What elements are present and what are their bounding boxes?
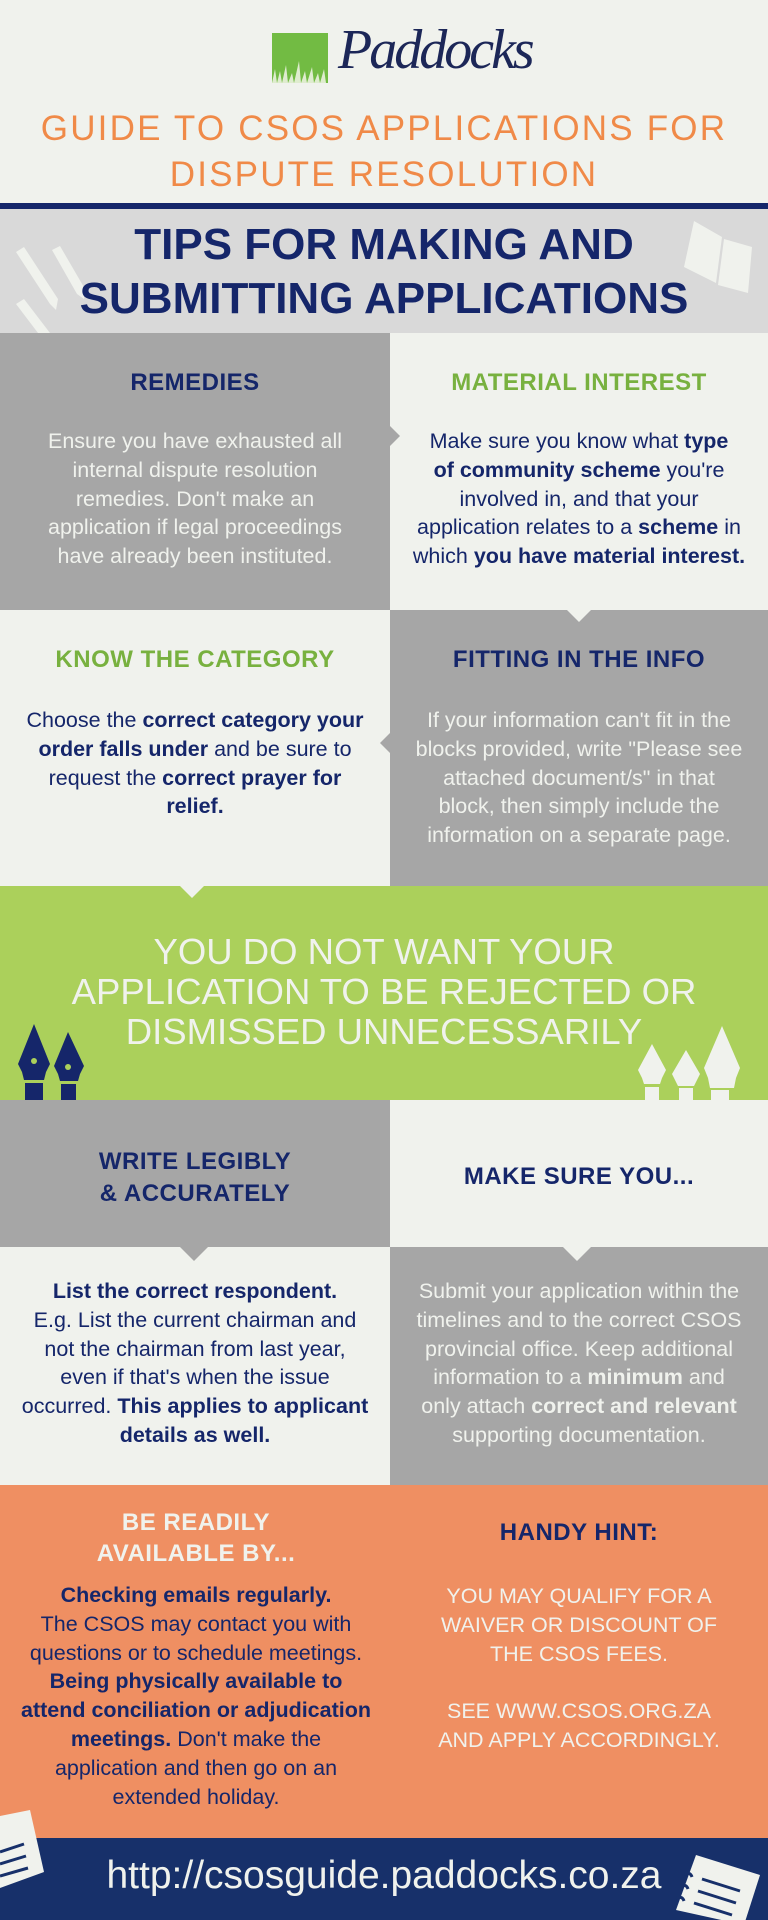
header background (0, 0, 768, 203)
navy rule (0, 203, 768, 209)
text: fitting body: If your information can't fit in the (427, 708, 731, 732)
panel: make sure body (390, 1247, 768, 1485)
arrow: make sure down (563, 1247, 591, 1261)
text: remedies body: application if legal proceedings (48, 515, 342, 539)
text: handy hint body: SEE WWW.CSOS.ORG.ZA (447, 1699, 711, 1723)
heading: tips for making and submitting applications: SUBMITTING APPLICATIONS (80, 274, 688, 323)
panel: know the category (26, 646, 364, 818)
text: remedies body: have already been instituted. (58, 544, 332, 568)
text: make sure body (416, 1279, 742, 1447)
text: remedies body: Ensure you have exhausted all (48, 429, 342, 453)
heading: write legibly: & ACCURATELY (100, 1180, 290, 1207)
text: respondent body: occurred. This applies to applicant (22, 1394, 368, 1418)
panel: green banner (0, 886, 768, 1100)
icon: open book (684, 221, 752, 293)
arrow: category down (180, 886, 204, 898)
text: availability body: application and then go on an (55, 1756, 337, 1780)
text: banner message: DISMISSED UNNECESSARILY (126, 1011, 642, 1052)
text: respondent body: not the chairman from last year, (44, 1337, 346, 1361)
arrow: remedies right (390, 426, 400, 446)
icon: document left (0, 1810, 44, 1888)
heading: material interest: MATERIAL INTEREST (451, 369, 707, 396)
heading: make sure you: MAKE SURE YOU... (464, 1163, 694, 1190)
panel: orange section (0, 1485, 768, 1838)
logo: green square (272, 33, 328, 83)
text: category body: Choose the correct category your (26, 708, 364, 732)
text: respondent body: details as well. (120, 1423, 270, 1447)
icon: document right (676, 1855, 760, 1920)
panel: fitting in the info (390, 610, 768, 886)
panel: remedies (0, 333, 390, 610)
title (41, 109, 727, 194)
heading: know the category: KNOW THE CATEGORY (55, 646, 335, 673)
icon: navy pens (18, 1024, 84, 1100)
panel: write legibly body (22, 1279, 368, 1447)
text: fitting body: information on a separate page. (427, 823, 731, 847)
text: handy hint body: AND APPLY ACCORDINGLY. (438, 1728, 720, 1752)
text: material interest body (412, 429, 745, 568)
text: availability body: Being physically available to (50, 1669, 342, 1693)
text: respondent body: E.g. List the current chairman and (34, 1308, 356, 1332)
text: material interest body: application relates to a scheme in (417, 515, 741, 539)
text: category body (26, 708, 364, 818)
title: GUIDE TO CSOS APPLICATIONS FOR (41, 109, 727, 148)
text: material interest body: Make sure you know what type (430, 429, 728, 453)
text: material interest body: which you have material interest. (413, 544, 745, 568)
heading: be readily available: AVAILABLE BY... (97, 1540, 295, 1567)
text: availability body: The CSOS may contact you with (41, 1612, 351, 1636)
text: make sure body: provincial office. Keep additional (425, 1337, 733, 1361)
text: handy hint body: WAIVER OR DISCOUNT OF (441, 1613, 717, 1637)
text: respondent body: List the correct respondent. (53, 1279, 337, 1303)
arrow: write legibly down (180, 1247, 208, 1261)
text: banner message: APPLICATION TO BE REJECTED OR (72, 971, 696, 1012)
heading: fitting in the info: FITTING IN THE INFO (453, 646, 705, 673)
heading: tips for making and submitting applications (80, 220, 688, 323)
text: material interest body: involved in, and that your (459, 487, 699, 511)
text: remedies body: remedies. Don't make an (76, 487, 314, 511)
arrow: material interest down (567, 610, 591, 622)
panel: footer url (0, 1838, 768, 1920)
text: respondent body (22, 1279, 368, 1447)
heading: write legibly: WRITE LEGIBLY (99, 1148, 291, 1175)
text: availability body: Checking emails regularly. (61, 1583, 331, 1607)
text: make sure body: information to a minimum and (433, 1365, 725, 1389)
text: availability body (21, 1583, 371, 1809)
text: banner message: YOU DO NOT WANT YOUR (153, 931, 615, 972)
text: fitting body: block, then simply include the (439, 794, 719, 818)
panel: material interest (412, 369, 745, 568)
text: category body: order falls under and be sure to (38, 737, 352, 761)
text: banner message (72, 931, 696, 1052)
heading: tips for making and submitting applications: TIPS FOR MAKING AND (134, 220, 634, 269)
text: availability body: extended holiday. (113, 1785, 279, 1809)
text: fitting body: attached document/s" in that (443, 766, 715, 790)
text: category body: relief. (166, 794, 224, 818)
text: remedies body (48, 429, 342, 568)
icon: pencils (16, 246, 84, 333)
text: fitting body (416, 708, 742, 847)
title: DISPUTE RESOLUTION (170, 155, 598, 194)
arrow: fitting left (380, 733, 390, 753)
text: handy hint body: YOU MAY QUALIFY FOR A (446, 1584, 712, 1608)
text: make sure body: supporting documentation. (452, 1423, 706, 1447)
text: url: http://csosguide.paddocks.co.za (106, 1854, 662, 1897)
text: handy hint body: THE CSOS FEES. (490, 1642, 668, 1666)
text: category body: request the correct prayer for (49, 766, 341, 790)
text: availability body: meetings. Don't make the (71, 1727, 321, 1751)
heading: remedies: REMEDIES (130, 369, 260, 396)
text: make sure body: only attach correct and relevant (421, 1394, 737, 1418)
panel: write legibly header (0, 1100, 390, 1247)
heading: write legibly (98, 1148, 291, 1207)
text: make sure body: timelines and to the correct CSOS (416, 1308, 742, 1332)
heading: be readily available: BE READILY (122, 1509, 270, 1536)
logo (272, 19, 533, 83)
text: respondent body: even if that's when the issue (60, 1365, 330, 1389)
icon: light pens (638, 1026, 740, 1100)
text: availability body: attend conciliation or adjudication (21, 1698, 371, 1722)
logo: Paddocks wordmark: Paddocks (338, 19, 532, 81)
text: handy hint body (438, 1584, 720, 1752)
panel: tips heading band (0, 209, 768, 333)
text: material interest body: of community scheme you're (434, 458, 724, 482)
heading: handy hint: HANDY HINT: (500, 1519, 658, 1546)
text: availability body: questions or to schedule meetings. (30, 1641, 362, 1665)
heading: be readily available (97, 1509, 295, 1567)
text: remedies body: internal dispute resolution (72, 458, 318, 482)
text: make sure body: Submit your application within the (419, 1279, 739, 1303)
text: fitting body: blocks provided, write "Please see (416, 737, 742, 761)
